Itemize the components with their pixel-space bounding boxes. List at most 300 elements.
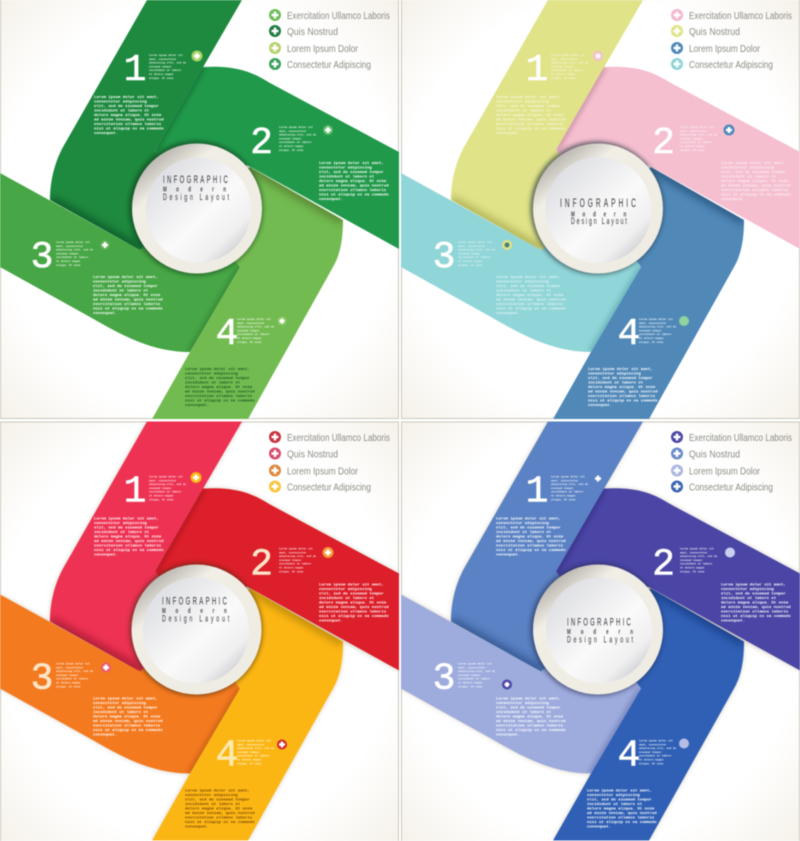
- body text 3: Lorem ipsum dolor sit amet,: [496, 275, 561, 280]
- section 2: [250, 544, 389, 624]
- body text 4: exercitation ullamco laboris: [587, 816, 655, 820]
- body text 3: ad minim veniam, quis nostrud: [93, 298, 163, 302]
- small text 3: eiusmod tempor: [458, 673, 481, 677]
- small text 1: amet, consectetur: [149, 58, 177, 61]
- small text 2: amet, consectetur: [279, 130, 307, 133]
- body text 2: dolore magna aliqua. Ut enim: [319, 600, 387, 606]
- center title: Design Layout: [163, 192, 229, 202]
- body text 1: nisi ut aliquip ex ea commodo: [496, 126, 566, 132]
- body text 4: ad minim veniam, quis nostrud: [185, 390, 255, 394]
- panel: green pinwheel: [0, 0, 399, 419]
- marker 4: [278, 316, 286, 326]
- small text 2: eiusmod tempor: [680, 558, 703, 562]
- body text 2: consequat.: [721, 620, 745, 624]
- small text 1: et dolore magna: [551, 72, 576, 76]
- small text 1: et dolore magna: [149, 72, 174, 76]
- section 3: [433, 658, 566, 738]
- body text 2: incididunt ut labore et: [721, 596, 777, 601]
- small text 1: eiusmod tempor: [149, 64, 172, 68]
- body text 4: exercitation ullamco laboris: [588, 394, 656, 399]
- small text 4: Lorem ipsum dolor sit: [237, 738, 271, 742]
- small text 1: adipiscing elit, sed do: [551, 61, 588, 65]
- body text 3: elit, sed do eiusmod tempor: [93, 284, 158, 289]
- small text 3: et dolore magna: [458, 259, 483, 263]
- small text 2: et dolore magna: [279, 566, 304, 570]
- body text 2: nisi ut aliquip ex ea commodo: [319, 192, 389, 198]
- legend item 4: Consectetur Adipiscing: [689, 60, 773, 71]
- small text 4: incididunt ut labore: [237, 754, 270, 758]
- body text 1: Lorem ipsum dolor sit amet,: [94, 95, 159, 100]
- number 4: 4: [618, 313, 640, 356]
- body text 4: elit, sed do eiusmod tempor: [185, 798, 250, 802]
- small text 3: adipiscing elit, sed do: [458, 669, 495, 673]
- body text 4: elit, sed do eiusmod tempor: [587, 798, 652, 802]
- small text 3: incididunt ut labore: [56, 255, 89, 259]
- small text 2: adipiscing elit, sed do: [680, 554, 717, 558]
- body text 2: ad minim veniam, quis nostrud: [319, 184, 389, 188]
- marker 1: [192, 50, 202, 62]
- small text 1: Lorem ipsum dolor sit: [551, 474, 585, 478]
- number 1: 1: [124, 49, 146, 92]
- center title: Modern: [163, 185, 226, 194]
- small text 3: aliqua. Ut enim: [458, 263, 483, 267]
- small text 2: aliqua. Ut enim: [279, 569, 304, 573]
- body text 2: exercitation ullamco laboris: [721, 188, 789, 193]
- number 2: 2: [250, 122, 273, 165]
- marker 4: [277, 740, 287, 750]
- body text 2: ad minim veniam, quis nostrud: [319, 605, 389, 610]
- small text 3: Lorem ipsum dolor sit: [458, 240, 492, 244]
- body text 4: incididunt ut labore et: [185, 802, 241, 807]
- small text 2: aliqua. Ut enim: [279, 148, 304, 152]
- small text 1: Lorem ipsum dolor sit: [551, 53, 585, 57]
- band 1: [451, 0, 643, 250]
- number 3: 3: [31, 236, 53, 279]
- body text 3: elit, sed do eiusmod tempor: [496, 284, 561, 289]
- body text 1: consequat.: [94, 132, 118, 136]
- small text 4: et dolore magna: [237, 758, 262, 762]
- fold shadow on band 2: [556, 67, 604, 150]
- band 2: [155, 67, 399, 249]
- small text 1: adipiscing elit, sed do: [551, 482, 588, 486]
- body text 2: exercitation ullamco laboris: [319, 188, 387, 193]
- small text 2: Lorem ipsum dolor sit: [279, 546, 313, 550]
- marker 1: [593, 51, 603, 61]
- marker 3: [100, 240, 110, 250]
- body text 4: nisi ut aliquip ex ea commodo: [185, 820, 255, 825]
- body text 1: elit, sed do eiusmod tempor: [94, 526, 159, 530]
- center title: INFOGRAPHIC: [163, 173, 228, 185]
- band soft outer shadow: [0, 422, 399, 840]
- body text 2: ad minim veniam, quis nostrud: [721, 605, 791, 610]
- body text 3: ad minim veniam, quis nostrud: [496, 298, 566, 302]
- body text 1: dolore magna aliqua. Ut enim: [496, 113, 564, 118]
- small text 3: amet, consectetur: [56, 666, 84, 669]
- center circle: [530, 142, 664, 274]
- small text 2: eiusmod tempor: [279, 558, 302, 562]
- body text 2: exercitation ullamco laboris: [319, 610, 387, 614]
- center circle: [530, 563, 664, 696]
- body text 1: consequat.: [496, 554, 520, 558]
- small text 1: incididunt ut labore: [551, 490, 584, 494]
- band soft outer shadow: [401, 422, 800, 840]
- band 2: [155, 488, 399, 670]
- body text 1: dolore magna aliqua. Ut enim: [94, 113, 162, 118]
- small text 3: eiusmod tempor: [56, 673, 79, 677]
- small text 1: eiusmod tempor: [551, 486, 574, 490]
- small text 1: incididunt ut labore: [149, 490, 182, 494]
- small text 4: aliqua. Ut enim: [237, 761, 262, 765]
- body text 1: dolore magna aliqua. Ut enim: [496, 534, 564, 540]
- small text 1: adipiscing elit, sed do: [149, 482, 186, 486]
- legend: [269, 9, 390, 71]
- marker 2: [322, 547, 334, 558]
- band 4: [553, 167, 744, 419]
- body text 1: nisi ut aliquip ex ea commodo: [496, 548, 566, 553]
- marker 1: [593, 474, 603, 484]
- fold shadow on band 1: [451, 200, 541, 250]
- small text 1: aliqua. Ut enim: [551, 497, 576, 501]
- center title: [162, 595, 229, 624]
- number 1: 1: [526, 470, 548, 514]
- body text 2: elit, sed do eiusmod tempor: [721, 592, 786, 596]
- legend item 3: Lorem Ipsum Dolor: [689, 466, 761, 478]
- marker 2: [724, 124, 734, 136]
- legend item 4: Consectetur Adipiscing: [689, 482, 773, 494]
- small text 3: Lorem ipsum dolor sit: [56, 662, 90, 666]
- body text 1: exercitation ullamco laboris: [496, 122, 564, 127]
- body text 2: nisi ut aliquip ex ea commodo: [319, 614, 389, 619]
- body text 1: consequat.: [94, 554, 118, 558]
- small text 4: et dolore magna: [237, 336, 262, 340]
- section 1: [496, 49, 603, 136]
- legend item 3: Lorem Ipsum Dolor: [689, 44, 761, 55]
- marker 4: [679, 316, 689, 326]
- section 4: [588, 313, 689, 408]
- small text 2: amet, consectetur: [279, 551, 307, 554]
- body text 4: nisi ut aliquip ex ea commodo: [587, 820, 657, 825]
- center title: Design Layout: [571, 216, 627, 226]
- small text 3: Lorem ipsum dolor sit: [458, 662, 492, 666]
- body text 1: ad minim veniam, quis nostrud: [94, 118, 164, 122]
- fold shadow on band 2: [155, 488, 203, 572]
- body text 4: Lorem ipsum dolor sit amet,: [185, 367, 250, 372]
- body text 4: consectetur adipiscing: [587, 793, 640, 798]
- small text 4: Lorem ipsum dolor sit: [639, 738, 673, 742]
- section 3: [31, 236, 163, 316]
- band 2: [556, 67, 800, 249]
- body text 4: dolore magna aliqua. Ut enim: [588, 385, 656, 390]
- body text 1: consectetur adipiscing: [496, 521, 549, 526]
- center title: INFOGRAPHIC: [162, 595, 227, 607]
- small text 4: adipiscing elit, sed do: [639, 325, 676, 329]
- body text 1: consequat.: [496, 132, 520, 136]
- small text 3: amet, consectetur: [458, 245, 486, 248]
- panel: blue pinwheel: [401, 422, 800, 841]
- body text 4: consequat.: [587, 826, 611, 830]
- fold shadow on band 2: [556, 488, 604, 572]
- body text 2: dolore magna aliqua. Ut enim: [721, 600, 789, 606]
- small text 2: Lorem ipsum dolor sit: [680, 546, 714, 550]
- band 1: [451, 422, 643, 672]
- small text 4: incididunt ut labore: [237, 332, 270, 336]
- body text 2: elit, sed do eiusmod tempor: [319, 592, 384, 596]
- band 1: [50, 422, 242, 672]
- fold shadow on band 3: [190, 267, 240, 352]
- body text 1: ad minim veniam, quis nostrud: [94, 539, 164, 544]
- body text 2: exercitation ullamco laboris: [721, 610, 789, 614]
- body text 3: incididunt ut labore et: [93, 288, 149, 294]
- center title: INFOGRAPHIC: [567, 616, 631, 628]
- body text 3: consectetur adipiscing: [93, 280, 146, 284]
- body text 2: consectetur adipiscing: [721, 166, 774, 170]
- number 4: 4: [216, 734, 238, 778]
- small text 4: amet, consectetur: [639, 743, 667, 746]
- small text 4: et dolore magna: [639, 336, 664, 340]
- body text 3: elit, sed do eiusmod tempor: [93, 706, 158, 710]
- body text 4: exercitation ullamco laboris: [185, 816, 253, 820]
- center title: Design Layout: [567, 634, 633, 645]
- small text 4: Lorem ipsum dolor sit: [639, 317, 673, 321]
- marker 3: [502, 240, 512, 250]
- body text 1: exercitation ullamco laboris: [94, 544, 162, 548]
- section 3: [31, 658, 163, 738]
- small text 1: et dolore magna: [551, 494, 576, 498]
- marker 3: [101, 662, 111, 672]
- body text 1: incididunt ut labore et: [94, 108, 150, 114]
- legend item 2: Quis Nostrud: [287, 27, 338, 38]
- fold shadow on band 4: [250, 167, 343, 220]
- band 4: [553, 588, 744, 840]
- small text 2: aliqua. Ut enim: [680, 569, 705, 573]
- section 4: [587, 734, 689, 830]
- section 1: [94, 49, 202, 136]
- small text 4: adipiscing elit, sed do: [237, 746, 274, 750]
- section 4: [185, 734, 287, 830]
- body text 2: Lorem ipsum dolor sit amet,: [319, 582, 384, 588]
- body text 1: incididunt ut labore et: [94, 530, 150, 535]
- body text 2: consequat.: [721, 198, 745, 202]
- legend item 2: Quis Nostrud: [689, 450, 740, 460]
- fold shadow on band 2: [155, 67, 203, 150]
- marker 2: [323, 125, 333, 135]
- body text 1: elit, sed do eiusmod tempor: [496, 526, 561, 530]
- fold shadow on band 3: [591, 267, 641, 352]
- small text 3: Lorem ipsum dolor sit: [56, 240, 90, 244]
- center title: [567, 616, 633, 645]
- center title: Modern: [571, 210, 626, 219]
- panel background: [0, 0, 398, 418]
- section 2: [250, 122, 389, 202]
- center title: Modern: [567, 628, 633, 636]
- small text 4: Lorem ipsum dolor sit: [237, 317, 271, 321]
- center title: Modern: [162, 607, 227, 615]
- small text 1: incididunt ut labore: [149, 68, 182, 72]
- small text 3: aliqua. Ut enim: [56, 684, 81, 688]
- body text 3: incididunt ut labore et: [496, 288, 552, 294]
- body text 4: Lorem ipsum dolor sit amet,: [587, 788, 652, 794]
- small text 4: adipiscing elit, sed do: [639, 746, 676, 750]
- body text 2: incididunt ut labore et: [721, 174, 777, 180]
- body text 1: Lorem ipsum dolor sit amet,: [496, 95, 561, 100]
- section 1: [94, 470, 202, 558]
- body text 4: Lorem ipsum dolor sit amet,: [185, 788, 250, 794]
- body text 1: consectetur adipiscing: [94, 100, 147, 104]
- body text 2: elit, sed do eiusmod tempor: [721, 170, 786, 175]
- small text 3: adipiscing elit, sed do: [56, 669, 93, 673]
- band 3: [401, 173, 641, 352]
- fold shadow on band 3: [591, 688, 641, 774]
- body text 4: elit, sed do eiusmod tempor: [588, 376, 653, 381]
- body text 2: consectetur adipiscing: [721, 587, 774, 592]
- fold shadow on band 4: [651, 167, 744, 220]
- legend item 3: Lorem Ipsum Dolor: [287, 44, 359, 55]
- center title: INFOGRAPHIC: [560, 197, 636, 211]
- legend item 1: Exercitation Ullamco Laboris: [287, 11, 390, 22]
- small text 1: Lorem ipsum dolor sit: [149, 474, 183, 478]
- small text 3: eiusmod tempor: [458, 251, 481, 255]
- band 4: [152, 167, 343, 419]
- body text 4: incididunt ut labore et: [185, 380, 241, 386]
- body text 3: exercitation ullamco laboris: [93, 302, 161, 307]
- body text 2: elit, sed do eiusmod tempor: [319, 170, 384, 175]
- body text 3: incididunt ut labore et: [496, 710, 552, 715]
- body text 2: dolore magna aliqua. Ut enim: [721, 179, 789, 184]
- body text 1: ad minim veniam, quis nostrud: [496, 539, 566, 544]
- small text 2: amet, consectetur: [680, 551, 708, 554]
- body text 3: ad minim veniam, quis nostrud: [496, 719, 566, 724]
- body text 4: dolore magna aliqua. Ut enim: [185, 806, 253, 812]
- body text 3: nisi ut aliquip ex ea commodo: [496, 306, 566, 312]
- section 2: [652, 544, 791, 624]
- legend: [269, 431, 390, 494]
- body text 2: consequat.: [319, 620, 343, 624]
- body text 3: consequat.: [93, 734, 117, 738]
- body text 3: consequat.: [496, 734, 520, 738]
- body text 3: dolore magna aliqua. Ut enim: [93, 293, 161, 298]
- section 1: [496, 470, 603, 558]
- band 2: [556, 488, 800, 670]
- small text 3: et dolore magna: [458, 680, 483, 684]
- panel: pastel pinwheel: [401, 0, 800, 419]
- panel background: [402, 0, 800, 418]
- body text 3: Lorem ipsum dolor sit amet,: [93, 275, 158, 280]
- body text 4: dolore magna aliqua. Ut enim: [185, 385, 253, 390]
- body text 4: consectetur adipiscing: [185, 793, 238, 798]
- body text 2: Lorem ipsum dolor sit amet,: [721, 161, 786, 166]
- body text 3: exercitation ullamco laboris: [496, 724, 564, 728]
- small text 2: Lorem ipsum dolor sit: [279, 125, 313, 129]
- marker 2: [725, 548, 735, 558]
- small text 2: adipiscing elit, sed do: [279, 554, 316, 558]
- body text 2: dolore magna aliqua. Ut enim: [319, 179, 387, 184]
- band 3: [0, 173, 240, 352]
- number 1: 1: [124, 470, 146, 514]
- legend item 3: Lorem Ipsum Dolor: [287, 466, 359, 478]
- body text 3: consequat.: [93, 312, 117, 316]
- body text 2: nisi ut aliquip ex ea commodo: [721, 614, 791, 619]
- body text 2: Lorem ipsum dolor sit amet,: [319, 161, 384, 166]
- small text 3: amet, consectetur: [56, 245, 84, 248]
- body text 1: nisi ut aliquip ex ea commodo: [94, 548, 164, 553]
- body text 2: incididunt ut labore et: [319, 174, 375, 180]
- small text 4: eiusmod tempor: [237, 750, 260, 754]
- band 3: [401, 594, 641, 774]
- legend: [671, 9, 792, 71]
- body text 4: dolore magna aliqua. Ut enim: [587, 806, 655, 812]
- body text 4: nisi ut aliquip ex ea commodo: [185, 398, 255, 404]
- small text 1: incididunt ut labore: [551, 68, 584, 72]
- body text 3: nisi ut aliquip ex ea commodo: [496, 728, 566, 733]
- number 2: 2: [652, 544, 675, 586]
- body text 4: consequat.: [185, 404, 209, 408]
- small text 2: incididunt ut labore: [680, 562, 713, 566]
- small text 3: aliqua. Ut enim: [56, 263, 81, 267]
- panel background: [0, 422, 398, 841]
- small text 1: et dolore magna: [149, 494, 174, 498]
- small text 4: adipiscing elit, sed do: [237, 325, 274, 329]
- body text 1: consectetur adipiscing: [496, 100, 549, 104]
- small text 1: aliqua. Ut enim: [149, 76, 174, 80]
- band 3: [0, 594, 240, 774]
- legend item 4: Consectetur Adipiscing: [287, 60, 371, 71]
- body text 3: consectetur adipiscing: [496, 280, 549, 284]
- body text 4: Lorem ipsum dolor sit amet,: [588, 367, 653, 372]
- center circle: [129, 141, 263, 275]
- small text 4: aliqua. Ut enim: [237, 340, 262, 344]
- small text 2: incididunt ut labore: [680, 140, 713, 144]
- small text 3: incididunt ut labore: [458, 255, 491, 259]
- body text 1: consectetur adipiscing: [94, 521, 147, 526]
- body text 4: elit, sed do eiusmod tempor: [185, 376, 250, 381]
- body text 3: exercitation ullamco laboris: [93, 724, 161, 728]
- center title: [163, 173, 229, 202]
- band 4: [152, 588, 343, 840]
- body text 1: incididunt ut labore et: [496, 108, 552, 114]
- small text 3: amet, consectetur: [458, 666, 486, 669]
- body text 3: nisi ut aliquip ex ea commodo: [93, 728, 163, 733]
- body text 1: exercitation ullamco laboris: [94, 122, 162, 127]
- body text 1: dolore magna aliqua. Ut enim: [94, 534, 162, 540]
- body text 3: Lorem ipsum dolor sit amet,: [93, 696, 158, 702]
- small text 4: incididunt ut labore: [639, 754, 672, 758]
- small text 1: eiusmod tempor: [551, 64, 574, 68]
- small text 1: adipiscing elit, sed do: [149, 61, 186, 65]
- body text 1: exercitation ullamco laboris: [496, 544, 564, 548]
- small text 4: et dolore magna: [639, 758, 664, 762]
- body text 4: consequat.: [185, 826, 209, 830]
- legend: [671, 431, 792, 494]
- small text 2: et dolore magna: [680, 566, 705, 570]
- small text 2: eiusmod tempor: [680, 136, 703, 140]
- body text 3: dolore magna aliqua. Ut enim: [93, 714, 161, 720]
- legend item 4: Consectetur Adipiscing: [287, 482, 371, 494]
- body text 2: incididunt ut labore et: [319, 596, 375, 601]
- marker 4: [679, 738, 689, 748]
- body text 1: ad minim veniam, quis nostrud: [496, 118, 566, 122]
- body text 3: exercitation ullamco laboris: [496, 302, 564, 307]
- body text 4: incididunt ut labore et: [588, 380, 644, 386]
- body text 2: nisi ut aliquip ex ea commodo: [721, 192, 791, 198]
- small text 2: adipiscing elit, sed do: [279, 133, 316, 137]
- section 4: [185, 313, 286, 408]
- body text 1: Lorem ipsum dolor sit amet,: [94, 516, 159, 522]
- number 4: 4: [618, 734, 640, 778]
- center title: Design Layout: [162, 613, 229, 624]
- small text 2: et dolore magna: [279, 144, 304, 148]
- body text 4: exercitation ullamco laboris: [185, 394, 253, 399]
- body text 3: Lorem ipsum dolor sit amet,: [496, 696, 561, 702]
